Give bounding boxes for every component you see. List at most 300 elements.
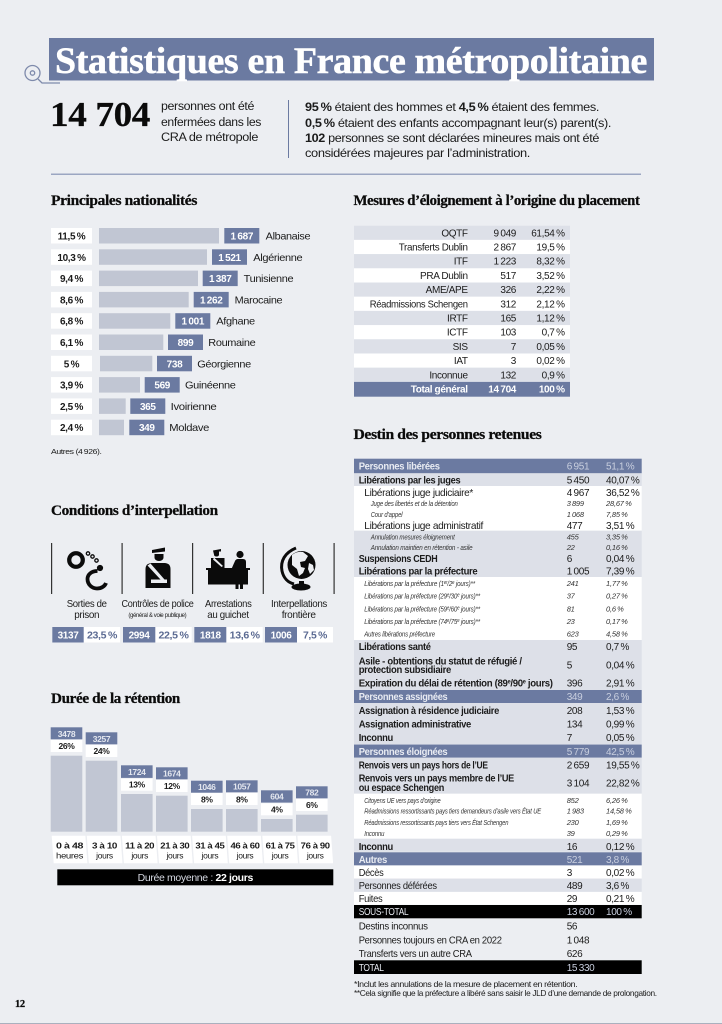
rows: libérations: 81 bbox=[567, 605, 575, 614]
rows: décès, déférées, fuites: 3 bbox=[567, 868, 573, 879]
key figure: 14 704: personnes ont été bbox=[161, 101, 254, 113]
table: mesures: 1,12 % bbox=[536, 314, 565, 324]
icon: handcuffs bbox=[69, 552, 106, 588]
icon: globe bbox=[282, 548, 316, 590]
rows: renvois: Renvois vers un pays membre de l’UE bbox=[359, 772, 514, 784]
rows: libérations: Suspensions CEDH bbox=[359, 553, 437, 565]
key figure: 14 704 bbox=[50, 95, 262, 144]
rows: libérations: Libérations juge administratif bbox=[364, 520, 483, 532]
row: total bbox=[359, 962, 595, 974]
table: mesures: OQTF bbox=[441, 228, 468, 239]
summary text: 95 % étaient des hommes et 4,5 % étaient des femmes. bbox=[305, 100, 599, 114]
rows: libérations: 1 005 bbox=[567, 566, 590, 578]
axis labels: jours bbox=[271, 850, 289, 860]
table: mesures: Réadmissions Schengen bbox=[370, 298, 468, 310]
bar chart: nationalités: Albanaise bbox=[266, 230, 311, 242]
icon: police officer bbox=[146, 548, 170, 588]
stats: conditions: 23,5 % bbox=[87, 630, 118, 642]
rows: libérations: e bbox=[452, 580, 455, 586]
rows: décès, déférées, fuites bbox=[359, 867, 635, 905]
row: personnes libérées: 51,1 % bbox=[606, 462, 635, 472]
rows: libérations: e bbox=[457, 592, 460, 598]
rows: hors sous-total: 1 048 bbox=[567, 936, 590, 946]
bar chart: nationalités: 2,5 % bbox=[60, 402, 83, 413]
bar chart: nationalités: 9,4 % bbox=[60, 274, 83, 285]
row: personnes assignées: 349 bbox=[567, 692, 583, 703]
row: autres: 521 bbox=[567, 855, 583, 866]
row: personnes assignées: 2,6 % bbox=[606, 692, 630, 703]
stats: conditions: 7,5 % bbox=[303, 630, 328, 642]
table: mesures: ICTF bbox=[447, 328, 468, 339]
axis labels: heures bbox=[56, 850, 83, 860]
bar chart: nationalités: Géorgienne bbox=[197, 358, 251, 370]
rows: décès, déférées, fuites: Décès bbox=[359, 867, 383, 879]
axis labels: 21 à 30 bbox=[160, 840, 190, 850]
footnotes: **Cela signifie que la préfecture a libéré sans saisir le JLD d’une demande de prolongation. bbox=[354, 988, 657, 998]
bar chart: nationalités: 1 521 bbox=[218, 253, 242, 264]
rows: hors sous-total: 626 bbox=[567, 949, 583, 960]
rows: libérations: 5 450 bbox=[567, 475, 590, 486]
rows: libérations: 1,77 % bbox=[606, 579, 628, 588]
bar chart: nationalités: 349 bbox=[139, 423, 155, 434]
rows: libérations: e bbox=[457, 606, 460, 612]
labels: au guichet bbox=[207, 609, 249, 621]
rows: décès, déférées, fuites: Personnes déférées bbox=[359, 880, 437, 892]
rows: libérations: 4,58 % bbox=[606, 630, 628, 639]
bar chart: nationalités: 2,4 % bbox=[60, 423, 83, 434]
rows: renvois: 0,29 % bbox=[606, 829, 628, 838]
bar chart: durée: 1046 bbox=[198, 782, 216, 792]
bar chart: nationalités: 1 262 bbox=[200, 295, 223, 306]
row: personnes éloignées bbox=[359, 746, 635, 758]
bar chart: nationalités: 5 % bbox=[64, 359, 80, 370]
labels: prison bbox=[74, 609, 100, 621]
rows: renvois: 39 bbox=[567, 829, 576, 838]
table: mesures: 19,5 % bbox=[536, 242, 565, 254]
rows: libérations: 5 bbox=[567, 660, 573, 672]
rows: assignations: 208 bbox=[567, 706, 583, 717]
table: mesures: 517 bbox=[500, 271, 517, 282]
row: autres bbox=[359, 854, 630, 866]
bar chart: nationalités: 3,9 % bbox=[60, 381, 83, 392]
rows: libérations: Asile - obtentions du statut de réfugié / bbox=[359, 656, 522, 668]
rows: renvois: 1,69 % bbox=[606, 818, 628, 827]
rows: renvois: 6,26 % bbox=[606, 796, 628, 805]
bar chart: durée: 12% bbox=[164, 781, 181, 791]
rows: libérations: Autres libérations préfecture bbox=[363, 630, 435, 639]
icon: magnifier bbox=[25, 66, 60, 83]
bar chart: nationalités: 6,1 % bbox=[60, 338, 83, 349]
table: mesures: SIS bbox=[453, 342, 468, 353]
rows: libérations: 2,91 % bbox=[606, 678, 635, 690]
rows: libérations: 0,6 % bbox=[606, 605, 624, 614]
row: total: TOTAL bbox=[359, 962, 384, 974]
table: mesures: 312 bbox=[500, 299, 517, 310]
rows: renvois: ou espace Schengen bbox=[359, 782, 444, 794]
table: mesures: 14 704 bbox=[488, 385, 517, 396]
page number: 12 bbox=[15, 999, 25, 1010]
rows: hors sous-total: Destins inconnus bbox=[359, 920, 428, 932]
rows: renvois: 1 983 bbox=[567, 807, 585, 816]
panel: mesures d'éloignement bbox=[354, 193, 640, 397]
rows: renvois: Réadmissions ressortissants pays tiers demandeurs d’asile vers État UE bbox=[364, 807, 542, 816]
rows: décès, déférées, fuites: Fuites bbox=[359, 893, 382, 905]
table: mesures: 103 bbox=[500, 328, 517, 339]
row: autres: 3,8 % bbox=[606, 855, 630, 866]
rows: libérations: jours)** bbox=[459, 605, 481, 614]
summary text bbox=[305, 100, 611, 160]
bar chart: durée: 3478 bbox=[58, 729, 76, 739]
table: mesures: 3,52 % bbox=[536, 271, 565, 282]
row: personnes assignées: Personnes assignées bbox=[359, 691, 448, 703]
table: mesures: 1 223 bbox=[494, 257, 517, 268]
bar chart: nationalités: Afghane bbox=[216, 316, 255, 328]
rows: libérations: Libérations par la préfecture (29 bbox=[364, 591, 464, 600]
rows: libérations: 40,07 % bbox=[606, 475, 640, 486]
bar chart: nationalités bbox=[51, 228, 311, 435]
footnotes: *Inclut les annulations de la mesure de placement en rétention. bbox=[354, 979, 577, 989]
rows: assignations: 0,99 % bbox=[606, 720, 635, 730]
summary text: 102 personnes se sont déclarées mineures mais ont été bbox=[305, 131, 600, 145]
key figure: 14 704: enfermées dans les bbox=[161, 117, 262, 129]
rows: libérations: Libérations par la préfecture (74 bbox=[364, 617, 464, 626]
bar chart: durée: 24% bbox=[94, 746, 110, 756]
table: mesures: 9 049 bbox=[494, 228, 517, 239]
rows: libérations: er bbox=[444, 580, 448, 586]
rows: hors sous-total: Transferts vers un autre CRA bbox=[359, 948, 472, 960]
rows: renvois: 0,12 % bbox=[606, 842, 635, 853]
table: mesures: 0,7 % bbox=[542, 328, 565, 339]
bar chart: nationalités: 365 bbox=[140, 402, 156, 413]
labels bbox=[67, 598, 327, 621]
table: mesures: IRTF bbox=[447, 314, 468, 324]
bar chart: durée: 1674 bbox=[163, 768, 181, 778]
bar chart: nationalités: 8,6 % bbox=[60, 295, 83, 306]
axis labels: 61 à 75 bbox=[266, 840, 295, 850]
table: mesures: 0,02 % bbox=[536, 356, 565, 367]
rows: libérations: 36,52 % bbox=[606, 488, 640, 499]
bar chart: nationalités: 738 bbox=[167, 359, 183, 370]
rows: renvois: Inconnu bbox=[364, 829, 385, 838]
labels: Contrôles de police bbox=[122, 598, 194, 610]
rows: libérations: Annulation mesures éloignement bbox=[370, 532, 456, 541]
row: autres: Autres bbox=[359, 854, 387, 866]
table: mesures: 2,12 % bbox=[536, 299, 565, 310]
row: personnes libérées bbox=[359, 460, 635, 472]
bar chart: durée: 1057 bbox=[233, 782, 251, 792]
rows: renvois: Réadmissions ressortissants pays tiers vers État Schengen bbox=[364, 818, 508, 827]
rows: libérations: 0,27 % bbox=[606, 591, 628, 600]
row: sous-total: 100 % bbox=[606, 907, 632, 918]
icon: arrest at the counter bbox=[206, 549, 250, 589]
labels: Interpellations bbox=[271, 598, 327, 610]
key figure: 14 704: 14 704 bbox=[50, 95, 150, 134]
stats: conditions: 2994 bbox=[129, 630, 150, 642]
table: mesures: 2,22 % bbox=[536, 285, 565, 296]
rows: libérations: /75 bbox=[448, 617, 458, 626]
bar chart: nationalités: Ivoirienne bbox=[171, 401, 217, 413]
bar chart: nationalités: Roumaine bbox=[208, 337, 256, 349]
rows: libérations: 7,85 % bbox=[606, 510, 628, 519]
summary text: considérées majeures par l’administration. bbox=[305, 146, 530, 160]
axis labels: 76 à 90 bbox=[301, 840, 330, 850]
rows: libérations: /30 bbox=[448, 591, 458, 600]
table: mesures: 0,05 % bbox=[536, 342, 565, 353]
bar chart: nationalités: 1 687 bbox=[231, 232, 254, 242]
table: mesures: Inconnue bbox=[429, 370, 468, 381]
rows: libérations: e bbox=[457, 618, 460, 624]
bar chart: nationalités: 1 001 bbox=[182, 317, 205, 328]
table: mesures: 7 bbox=[511, 342, 517, 353]
rows: libérations: Expiration du délai de rétention (89 bbox=[359, 678, 521, 690]
rows: décès, déférées, fuites: 0,02 % bbox=[606, 868, 635, 879]
callout: durée moyenne bbox=[57, 869, 333, 885]
heading: Durée de la rétention bbox=[51, 691, 180, 707]
rows: libérations: 477 bbox=[567, 521, 583, 532]
rows: décès, déférées, fuites: 0,21 % bbox=[606, 894, 635, 905]
rows: hors sous-total: Personnes toujours en CRA en 2022 bbox=[359, 934, 502, 946]
table: destin bbox=[354, 459, 642, 974]
rows: libérations: 0,7 % bbox=[606, 642, 630, 653]
table: mesures: 3 bbox=[511, 356, 517, 367]
row: personnes éloignées: Personnes éloignées bbox=[359, 746, 448, 758]
rows: libérations: 28,67 % bbox=[605, 499, 632, 508]
axis labels: jours bbox=[306, 850, 324, 860]
rows: assignations: 1,53 % bbox=[606, 706, 635, 717]
axis labels: jours bbox=[236, 850, 253, 860]
axis labels: 46 à 60 bbox=[230, 840, 260, 850]
stats: conditions: 3137 bbox=[58, 630, 79, 642]
rows: assignations: 0,05 % bbox=[606, 733, 635, 744]
labels: Sorties de bbox=[67, 598, 107, 610]
stats: conditions bbox=[52, 627, 333, 642]
stats: conditions: 13,6 % bbox=[230, 630, 261, 642]
rows: libérations: 6 bbox=[567, 554, 573, 565]
rows: renvois: 16 bbox=[567, 842, 578, 853]
bar chart: durée: 13% bbox=[129, 780, 146, 790]
rows: libérations: 22 bbox=[566, 543, 576, 552]
axis labels: jours bbox=[201, 850, 218, 860]
axis labels: jours bbox=[165, 850, 183, 860]
axis labels: 3 à 10 bbox=[92, 840, 118, 850]
rows: renvois: Renvois vers un pays hors de l’UE bbox=[359, 760, 488, 772]
table: mesures: 2 867 bbox=[494, 242, 517, 254]
bar chart: durée: 6% bbox=[306, 800, 318, 810]
panel: durée de la rétention bbox=[51, 691, 333, 885]
table: mesures: PRA Dublin bbox=[420, 271, 468, 282]
rows: libérations: Libérations par la préfecture (59 bbox=[364, 605, 464, 614]
bar chart: durée: 782 bbox=[305, 788, 319, 798]
rows: renvois: 14,58 % bbox=[606, 807, 632, 816]
bar chart: durée: 604 bbox=[270, 792, 284, 802]
table: mesures: Transferts Dublin bbox=[399, 242, 468, 254]
rows: libérations bbox=[359, 474, 640, 690]
bar chart: durée: 4% bbox=[271, 804, 283, 814]
rows: libérations: jours)** bbox=[459, 591, 481, 600]
bar chart: nationalités: Moldave bbox=[169, 422, 210, 434]
stats: conditions: 1818 bbox=[200, 630, 222, 642]
table: mesures: AME/APE bbox=[426, 285, 468, 296]
rows: hors sous-total: 56 bbox=[567, 922, 578, 932]
rows: libérations: 623 bbox=[567, 630, 580, 639]
rows: libérations: Annulation maintien en rétention - asile bbox=[370, 543, 472, 552]
row: sous-total: SOUS-TOTAL bbox=[359, 906, 409, 918]
panel: destin des personnes retenues bbox=[354, 427, 657, 998]
rows: libérations: 455 bbox=[567, 532, 580, 541]
bar chart: nationalités: 6,8 % bbox=[60, 317, 83, 328]
rows: hors sous-total bbox=[359, 920, 590, 960]
rows: renvois: 2 659 bbox=[567, 760, 590, 772]
rows: assignations: Inconnu bbox=[359, 732, 393, 744]
rows: libérations: jours) bbox=[526, 678, 553, 690]
row: personnes assignées bbox=[359, 691, 630, 703]
rows: libérations: 0,17 % bbox=[606, 617, 628, 626]
axis labels: jours bbox=[130, 850, 148, 860]
rows: libérations: /60 bbox=[448, 605, 458, 614]
rows: libérations: 1 068 bbox=[567, 510, 585, 519]
bar chart: nationalités: 899 bbox=[178, 338, 194, 349]
rows: libérations: Libérations juge judiciaire* bbox=[364, 487, 473, 499]
table: mesures: Total général bbox=[411, 385, 468, 396]
key figure: 14 704: CRA de métropole bbox=[161, 132, 258, 144]
row: sous-total bbox=[359, 906, 632, 918]
axis labels: jours bbox=[95, 850, 113, 860]
rows: renvois: 230 bbox=[566, 818, 580, 827]
rows: libérations: e bbox=[523, 680, 526, 686]
rows: assignations: 7 bbox=[567, 733, 573, 744]
axis labels: 0 à 48 bbox=[56, 840, 84, 850]
row: personnes libérées: Personnes libérées bbox=[359, 460, 440, 472]
rows: libérations: 3,35 % bbox=[606, 532, 628, 541]
bar chart: durée bbox=[51, 727, 328, 832]
stats: conditions: 1006 bbox=[271, 630, 292, 642]
rows: libérations: 23 bbox=[566, 617, 576, 626]
axis labels: 31 à 45 bbox=[195, 840, 225, 850]
rows: libérations: e bbox=[447, 618, 449, 624]
row: total: 15 330 bbox=[567, 963, 595, 974]
table: mesures: 8,32 % bbox=[536, 257, 565, 268]
labels: Arrestations bbox=[205, 598, 252, 610]
rows: libérations: /2 bbox=[446, 579, 453, 588]
footnotes bbox=[354, 979, 657, 998]
labels: frontière bbox=[282, 609, 316, 621]
rows: assignations: Assignation à résidence judiciaire bbox=[359, 705, 499, 717]
rows: libérations: jours)** bbox=[454, 579, 476, 588]
rows: renvois: Inconnu bbox=[359, 841, 393, 853]
rows: assignations: 134 bbox=[567, 720, 583, 730]
row: personnes libérées: 6 951 bbox=[567, 462, 590, 472]
rows: renvois: 852 bbox=[567, 796, 580, 805]
heading: Mesures d’éloignement à l’origine du placement bbox=[354, 193, 640, 209]
bar chart: durée: 26% bbox=[59, 741, 75, 751]
rows: libérations: 0,04 % bbox=[606, 660, 635, 672]
bar chart: nationalités: 10,3 % bbox=[57, 253, 86, 264]
table: mesures: 61,54 % bbox=[531, 228, 565, 239]
row: personnes éloignées: 42,5 % bbox=[606, 747, 635, 758]
bar chart: durée: 3257 bbox=[93, 734, 111, 744]
bar chart: durée: 1724 bbox=[128, 767, 146, 777]
table: mesures bbox=[354, 226, 570, 397]
rows: assignations bbox=[359, 705, 635, 744]
rows: renvois: Citoyens UE vers pays d’origine bbox=[364, 796, 441, 805]
bar chart: nationalités: Tunisienne bbox=[244, 273, 294, 285]
row: sous-total: 13 600 bbox=[567, 907, 595, 918]
rows: libérations: e bbox=[447, 592, 449, 598]
table: mesures: ITF bbox=[454, 257, 468, 268]
rows: libérations: protection subsidiaire bbox=[359, 664, 451, 676]
bar chart: durée: 8% bbox=[201, 794, 213, 804]
summary text: 0,5 % étaient des enfants accompagnant leur(s) parent(s). bbox=[305, 116, 611, 130]
heading: Destin des personnes retenues bbox=[354, 427, 542, 443]
heading: Conditions d’interpellation bbox=[51, 503, 218, 519]
table: mesures: 0,9 % bbox=[542, 370, 565, 381]
rows: libérations: Libérations par la préfecture bbox=[359, 566, 478, 578]
rows: décès, déférées, fuites: 489 bbox=[567, 881, 583, 892]
rows: renvois: 19,55 % bbox=[606, 760, 640, 772]
rows: libérations: 3,51 % bbox=[606, 521, 635, 532]
panel: principales nationalités bbox=[51, 193, 311, 456]
labels: (général & voie publique) bbox=[128, 613, 187, 619]
rows: libérations: 0,04 % bbox=[606, 554, 635, 565]
rows: libérations: Libérations santé bbox=[359, 641, 431, 653]
table: mesures: 100 % bbox=[539, 385, 565, 396]
rows: libérations: 396 bbox=[567, 678, 583, 690]
axis labels bbox=[52, 836, 333, 863]
rows: libérations: Libérations par les juges bbox=[359, 474, 461, 486]
rows: renvois bbox=[359, 760, 640, 853]
table: mesures: 165 bbox=[500, 314, 517, 324]
callout: durée moyenne: Durée moyenne : 22 jours bbox=[138, 872, 253, 884]
bar chart: nationalités: 1 387 bbox=[209, 274, 232, 285]
rows: libérations: e bbox=[508, 680, 511, 686]
rows: libérations: 0,16 % bbox=[606, 543, 628, 552]
bar chart: durée: 8% bbox=[236, 794, 248, 804]
rows: renvois: 3 104 bbox=[567, 778, 590, 790]
rows: libérations: 95 bbox=[567, 642, 578, 653]
bar chart: nationalités: Guinéenne bbox=[185, 380, 236, 392]
rows: libérations: 3 899 bbox=[567, 499, 585, 508]
rows: libérations: 7,39 % bbox=[606, 566, 635, 578]
rows: libérations: 241 bbox=[566, 579, 579, 588]
rows: libérations: /90 bbox=[510, 678, 523, 690]
rows: décès, déférées, fuites: 3,6 % bbox=[606, 881, 630, 892]
rows: renvois: 22,82 % bbox=[606, 778, 640, 790]
panel: conditions d'interpellation bbox=[51, 503, 335, 642]
table: mesures: 326 bbox=[500, 285, 517, 296]
note: autres: Autres (4 926). bbox=[51, 447, 102, 456]
stats: conditions: 22,5 % bbox=[158, 630, 190, 642]
rows: décès, déférées, fuites: 29 bbox=[567, 894, 578, 905]
heading: Principales nationalités bbox=[51, 193, 198, 209]
axis labels: 11 à 20 bbox=[125, 840, 155, 850]
title: Statistiques en France métropolitaine bbox=[55, 41, 647, 82]
bar chart: nationalités: Marocaine bbox=[235, 294, 283, 306]
table: mesures: IAT bbox=[454, 356, 468, 367]
rows: assignations: Assignation administrative bbox=[359, 718, 471, 730]
bar chart: nationalités: 11,5 % bbox=[58, 232, 86, 242]
row: personnes éloignées: 5 779 bbox=[567, 747, 590, 758]
rows: libérations: 37 bbox=[567, 591, 576, 600]
bar chart: nationalités: 569 bbox=[154, 381, 171, 392]
rows: libérations: e bbox=[447, 606, 449, 612]
rows: libérations: Libérations par la préfecture (1 bbox=[364, 579, 460, 588]
rows: libérations: Cour d’appel bbox=[371, 510, 403, 519]
table: mesures: 132 bbox=[500, 370, 517, 381]
rows: libérations: 4 967 bbox=[567, 488, 590, 499]
rows: libérations: Juge des libertés et de la détention bbox=[370, 499, 458, 508]
rows: libérations: jours)** bbox=[459, 617, 481, 626]
bar chart: nationalités: Algérienne bbox=[253, 252, 303, 264]
